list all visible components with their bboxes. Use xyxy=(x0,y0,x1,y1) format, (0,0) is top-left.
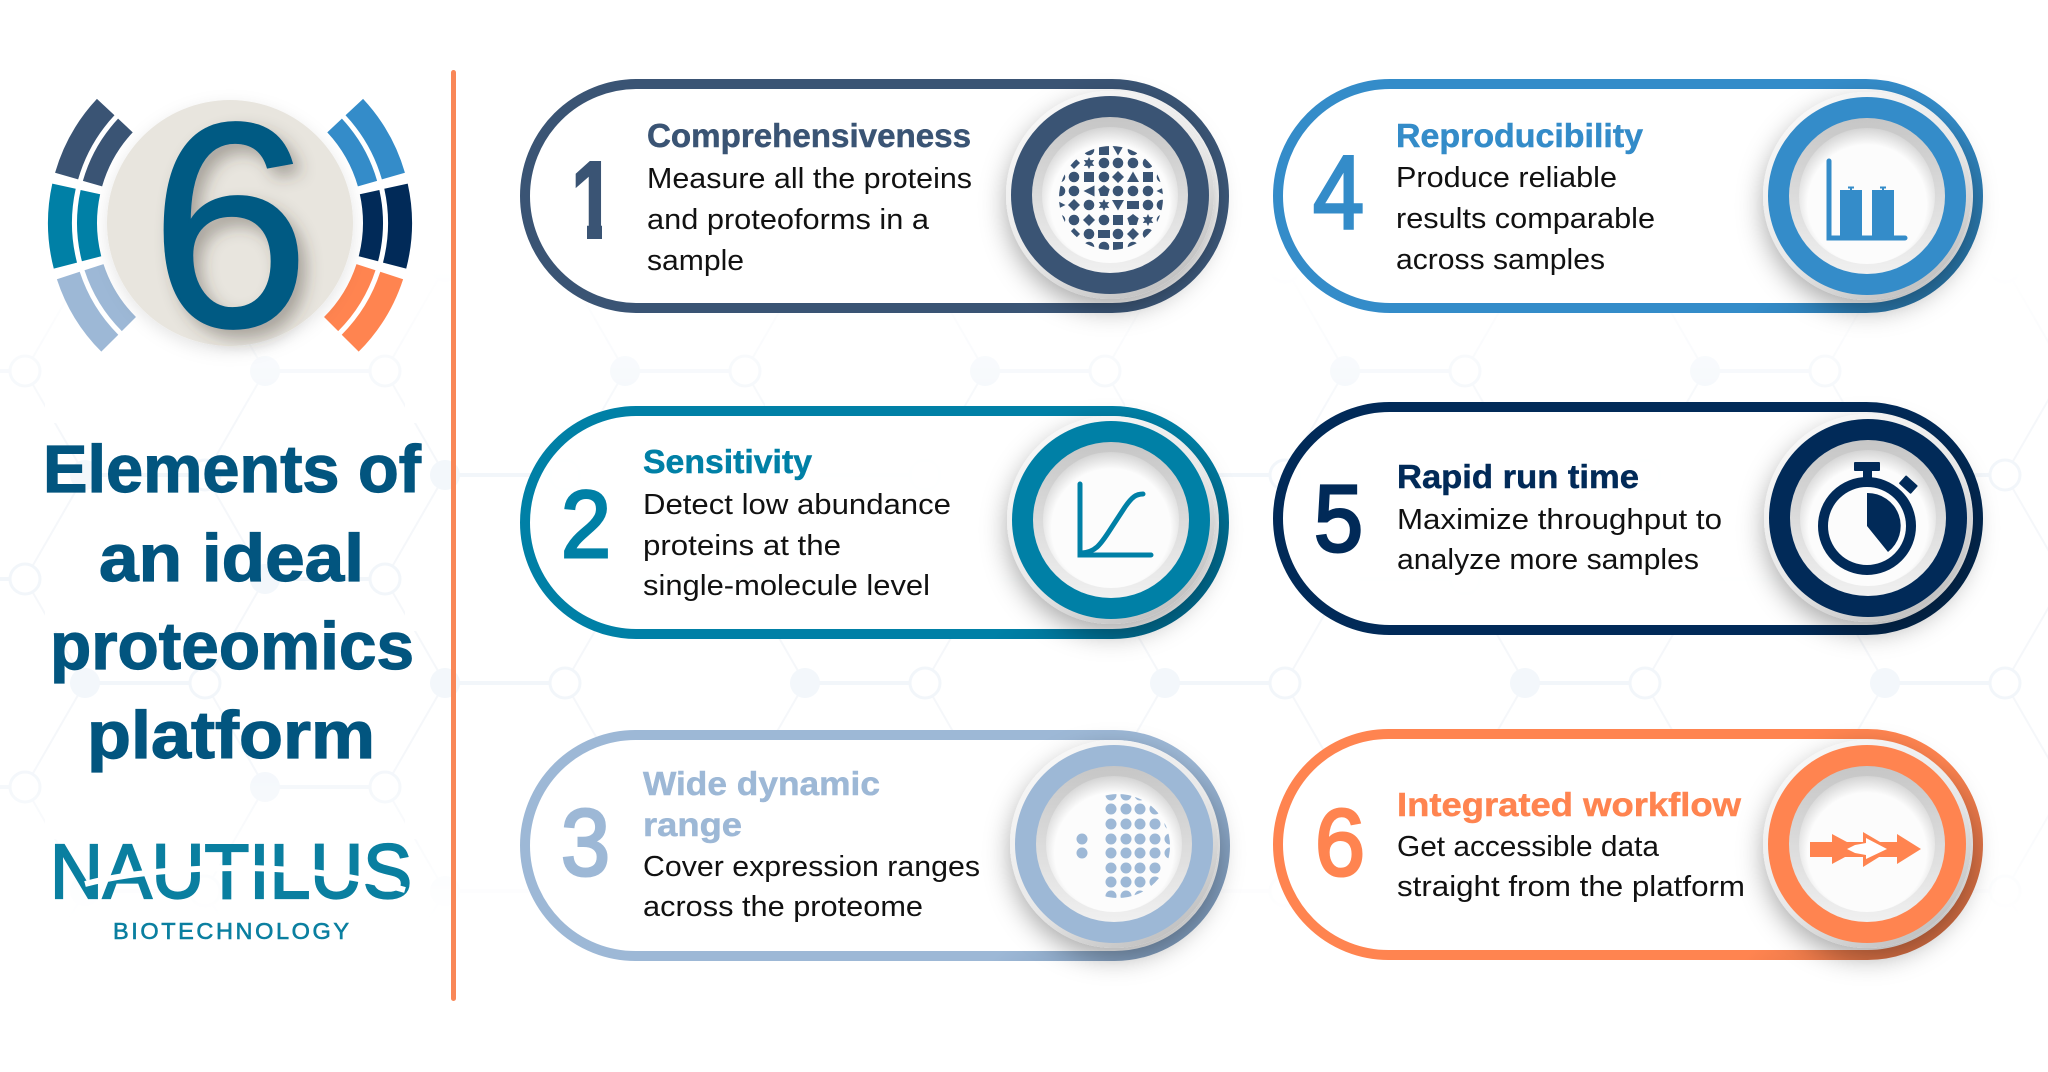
icon: response curve xyxy=(1080,484,1151,555)
text block 2: Sensitivity xyxy=(643,443,813,480)
text block 4: Produce reliable xyxy=(1396,162,1617,194)
text block 4: results comparable xyxy=(1396,203,1655,235)
divider line xyxy=(451,70,456,1001)
emblem: big six with arcs xyxy=(60,62,400,388)
icon ring 4 xyxy=(1763,92,1971,300)
title xyxy=(43,432,422,773)
icon ring 1 xyxy=(1006,91,1214,299)
number 1: 1 xyxy=(571,139,615,262)
pill outline xyxy=(1278,84,1978,308)
number 2: 2 xyxy=(561,472,611,578)
text block 1: sample xyxy=(647,245,744,277)
icon: bar chart xyxy=(1829,161,1905,238)
text block 2: proteins at the xyxy=(643,530,841,562)
arc segments, right side xyxy=(331,107,400,343)
icon ring 5 xyxy=(1764,414,1972,622)
text block 3: across the proteome xyxy=(643,891,923,923)
text block 5: analyze more samples xyxy=(1397,544,1699,576)
panel 3: Wide dynamic range xyxy=(525,735,1225,956)
pill outline xyxy=(525,411,1224,634)
text block 4: across samples xyxy=(1396,244,1605,276)
text block 5: Maximize throughput to xyxy=(1397,504,1722,536)
icon: dot field xyxy=(1076,794,1170,898)
panel 2: Sensitivity xyxy=(525,411,1224,634)
text block 3: Cover expression ranges xyxy=(643,851,980,883)
text block 1: Comprehensiveness xyxy=(647,117,971,154)
title: Elements of xyxy=(43,432,422,507)
icon ring 3 xyxy=(1010,740,1218,948)
text block 3: Wide dynamic xyxy=(643,765,880,802)
text block 6: Integrated workflow xyxy=(1397,786,1741,823)
logo: Nautilus Biotechnology: NAUTILUS xyxy=(50,829,412,915)
pill outline xyxy=(1278,734,1978,955)
title: proteomics xyxy=(50,609,414,684)
pill outline xyxy=(525,735,1225,956)
number 5: 5 xyxy=(1314,466,1363,572)
text block 6: straight from the platform xyxy=(1397,871,1745,903)
text block 5: Rapid run time xyxy=(1397,458,1639,495)
beige disc xyxy=(107,100,353,346)
icon ring 2 xyxy=(1007,416,1215,624)
arc segments, left side xyxy=(60,107,129,343)
panel 6: Integrated workflow xyxy=(1278,734,1978,955)
text block 1: and proteoforms in a xyxy=(647,204,929,236)
number 3: 3 xyxy=(561,790,610,896)
text block 2: Detect low abundance xyxy=(643,489,951,521)
text block 1: Measure all the proteins xyxy=(647,163,972,195)
text block 3 xyxy=(643,765,980,923)
number 4: 4 xyxy=(1313,135,1364,251)
text block 2 xyxy=(643,443,951,602)
text block 3: range xyxy=(643,806,742,843)
pill outline xyxy=(525,84,1224,308)
text block 6 xyxy=(1397,786,1745,903)
pill outline xyxy=(1278,407,1978,630)
logo: Nautilus Biotechnology: BIOTECHNOLOGY xyxy=(113,918,349,944)
panel 5: Rapid run time xyxy=(1278,407,1978,630)
text block 6: Get accessible data xyxy=(1397,831,1659,863)
title: an ideal xyxy=(99,521,364,596)
icon ring 6 xyxy=(1763,740,1971,948)
background honeycomb network xyxy=(0,374,2048,804)
text block 4: Reproducibility xyxy=(1396,117,1644,154)
icon: stopwatch xyxy=(1823,462,1918,570)
text block 1 xyxy=(647,117,972,277)
text block 2: single-molecule level xyxy=(643,570,930,602)
icon: arrows xyxy=(1810,832,1921,867)
text block 4 xyxy=(1396,117,1655,276)
numeral 6: 6 xyxy=(150,62,310,388)
number 6: 6 xyxy=(1315,790,1365,896)
panel 4: Reproducibility xyxy=(1278,84,1978,308)
title: platform xyxy=(87,698,375,773)
panel 1: Comprehensiveness xyxy=(525,84,1224,308)
text block 5 xyxy=(1397,458,1722,576)
icon: shape sphere xyxy=(1059,146,1163,250)
